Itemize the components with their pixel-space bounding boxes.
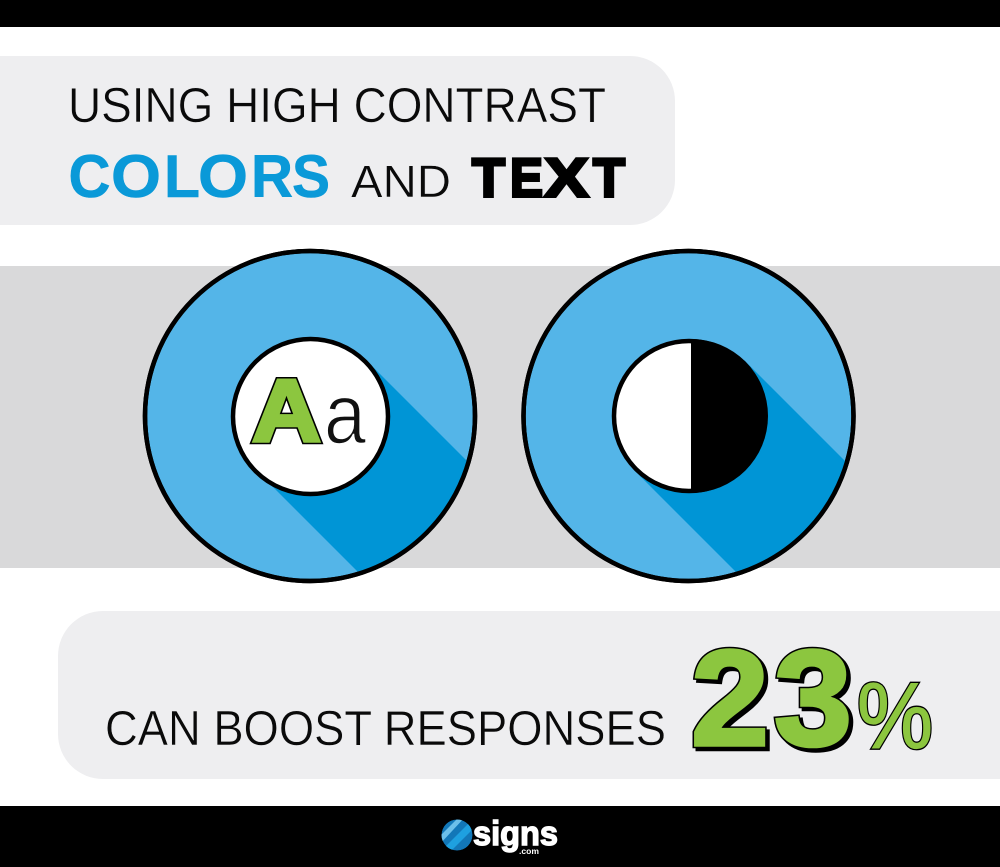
heading word: text: X bbox=[544, 146, 589, 208]
statistic value: 23% bbox=[691, 622, 933, 777]
statistic value: 23%: % bbox=[857, 663, 933, 768]
panel: heading bbox=[0, 56, 675, 225]
statistic value: 23%: 2 bbox=[691, 622, 769, 774]
icon: contrast circle bbox=[521, 248, 856, 584]
icon: typography circle bbox=[142, 248, 478, 584]
heading word: colors: R bbox=[251, 143, 293, 210]
top black bar bbox=[0, 0, 1000, 27]
statistic value: 23%: 3 bbox=[774, 622, 852, 774]
statistic value: 23%: 3 bbox=[774, 622, 852, 774]
heading word: colors: O bbox=[198, 143, 248, 210]
heading word: text: T bbox=[472, 146, 505, 208]
heading word: text: E bbox=[510, 146, 543, 208]
bottom black bar bbox=[0, 806, 1000, 867]
statistic value: 23%: % bbox=[857, 663, 933, 768]
logo: signs.com bbox=[442, 819, 558, 854]
heading word: text: T bbox=[593, 146, 625, 208]
logo wordmark: signs bbox=[473, 815, 558, 853]
heading word: and: AND bbox=[351, 156, 451, 207]
heading word: colors: S bbox=[292, 143, 330, 210]
long shadow bbox=[636, 360, 845, 572]
grey band bbox=[0, 266, 1000, 568]
letter: bold A: A bbox=[252, 361, 321, 460]
panel: statistic bbox=[58, 611, 1000, 779]
heading word: colors: O bbox=[111, 143, 161, 210]
heading word: colors: L bbox=[164, 143, 200, 210]
letter: bold A: A bbox=[252, 361, 321, 460]
statistic value: 23%: 2 bbox=[691, 622, 769, 774]
letter: light a: a bbox=[324, 367, 367, 462]
half white half black disc bbox=[614, 339, 768, 493]
heading word: text bbox=[472, 146, 625, 208]
heading word: colors bbox=[68, 143, 330, 210]
statistic value: 23%: 2 bbox=[694, 625, 772, 777]
statistic label: CAN BOOST RESPONSES bbox=[105, 702, 666, 756]
statistic value: 23%: 3 bbox=[777, 625, 855, 777]
long shadow bbox=[272, 366, 466, 572]
logo mark bbox=[442, 820, 472, 850]
heading word: colors: C bbox=[68, 143, 110, 210]
inner white circle bbox=[233, 339, 388, 494]
logo suffix: .com bbox=[519, 847, 539, 856]
heading line 1: USING HIGH CONTRAST bbox=[68, 79, 606, 133]
